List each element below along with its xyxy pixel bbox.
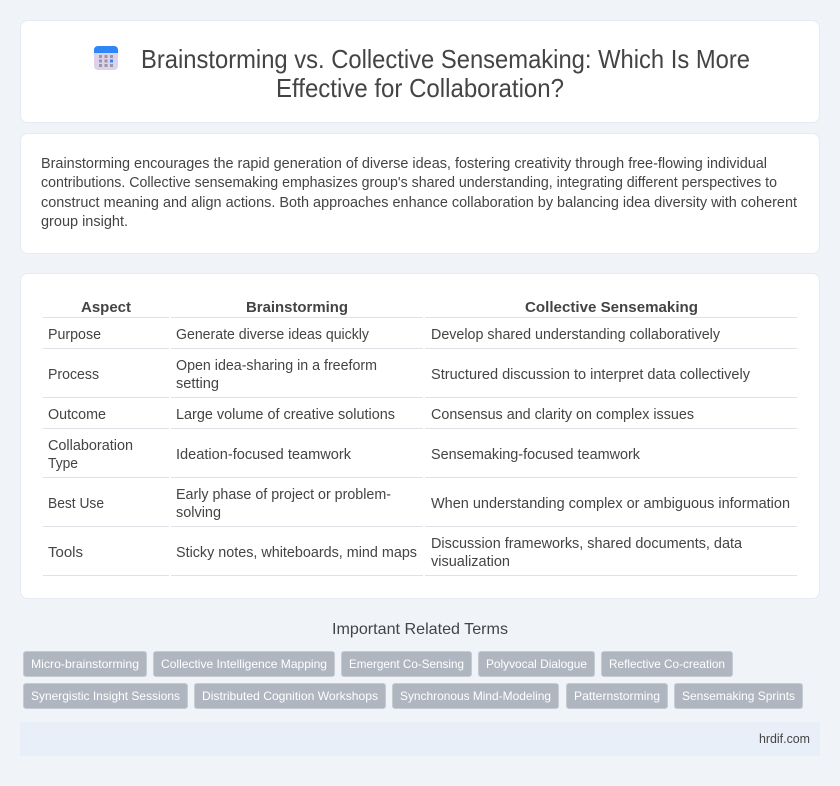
- title: Effective for Collaboration?: [276, 75, 564, 103]
- row: Collaboration Type: Collaboration: [48, 438, 133, 454]
- row: Tools: Discussion frameworks, shared documents, data: [431, 536, 742, 552]
- related terms tags: Patternstorming: [574, 689, 660, 703]
- footer source text: hrdif.com: [759, 731, 810, 746]
- row: Purpose: Generate diverse ideas quickly: [176, 327, 370, 343]
- row: Tools: Sticky notes, whiteboards, mind maps: [176, 545, 417, 561]
- row: Outcome: Large volume of creative solutions: [176, 407, 395, 423]
- text block: introduction paragraph: construct meaning and align actions. Both approaches enhance collaboration by balancing idea diversity with coherent: [41, 195, 797, 211]
- text block: introduction paragraph: Brainstorming encourages the rapid generation of diverse ideas, fostering creativity through free-flowing individual: [41, 156, 767, 172]
- related terms tags: Emergent Co-Sensing: [349, 657, 464, 671]
- table header row: Collective Sensemaking: [525, 300, 698, 316]
- panel: header card: [20, 20, 820, 122]
- row: Best Use: [48, 487, 790, 521]
- row: Process: Open idea-sharing in a freeform: [176, 358, 377, 374]
- icon: calendar: [94, 46, 118, 70]
- panel: comparison table: [20, 274, 820, 598]
- title: Brainstorming vs. Collective Sensemaking: Which Is More: [141, 46, 750, 74]
- row: Tools: Tools: [48, 545, 83, 561]
- row: Process: Structured discussion to interpret data collectively: [431, 367, 751, 383]
- row: Collaboration Type: Type: [48, 456, 78, 472]
- panel: introduction: [20, 134, 820, 254]
- footer bar: [20, 722, 820, 756]
- row: Process: setting: [176, 376, 219, 392]
- related terms tags: Distributed Cognition Workshops: [202, 689, 378, 703]
- row: Process: [48, 358, 751, 392]
- row: Best Use: solving: [176, 505, 221, 521]
- row: Purpose: Purpose: [48, 327, 101, 343]
- row: Outcome: Outcome: [48, 407, 106, 423]
- row: Best Use: Best Use: [48, 496, 104, 512]
- row: Collaboration Type: [48, 438, 641, 472]
- row: Best Use: Early phase of project or problem-: [176, 487, 391, 503]
- table header row: Aspect: [81, 300, 131, 316]
- title: [141, 46, 750, 103]
- related terms tags: Collective Intelligence Mapping: [161, 657, 327, 671]
- table header row: [81, 300, 698, 316]
- related terms tags: Synergistic Insight Sessions: [31, 689, 180, 703]
- row: Purpose: [48, 327, 721, 343]
- related terms tags: Synchronous Mind-Modeling: [400, 689, 551, 703]
- row: Outcome: Consensus and clarity on complex issues: [431, 407, 694, 423]
- table header row: Brainstorming: [246, 300, 348, 316]
- related terms tags: [24, 652, 802, 708]
- related terms tags: Micro-brainstorming: [31, 657, 139, 671]
- related terms tags: Sensemaking Sprints: [682, 689, 795, 703]
- related terms tags: Reflective Co-creation: [609, 657, 725, 671]
- text block: introduction paragraph: [41, 156, 797, 230]
- row: Collaboration Type: Sensemaking-focused teamwork: [431, 447, 641, 463]
- heading: related terms: Important Related Terms: [332, 621, 508, 638]
- text block: introduction paragraph: group insight.: [41, 214, 128, 230]
- row: Tools: visualization: [431, 554, 510, 570]
- row: Collaboration Type: Ideation-focused teamwork: [176, 447, 352, 463]
- row: Tools: [48, 536, 742, 570]
- row: Purpose: Develop shared understanding collaboratively: [431, 327, 721, 343]
- row: Outcome: [48, 407, 694, 423]
- row: Process: Process: [48, 367, 99, 383]
- row: Best Use: When understanding complex or ambiguous information: [431, 496, 790, 512]
- related terms tags: Polyvocal Dialogue: [486, 657, 587, 671]
- text block: introduction paragraph: contributions. Collective sensemaking emphasizes group's shared understanding, integrating different perspectives to: [41, 175, 777, 191]
